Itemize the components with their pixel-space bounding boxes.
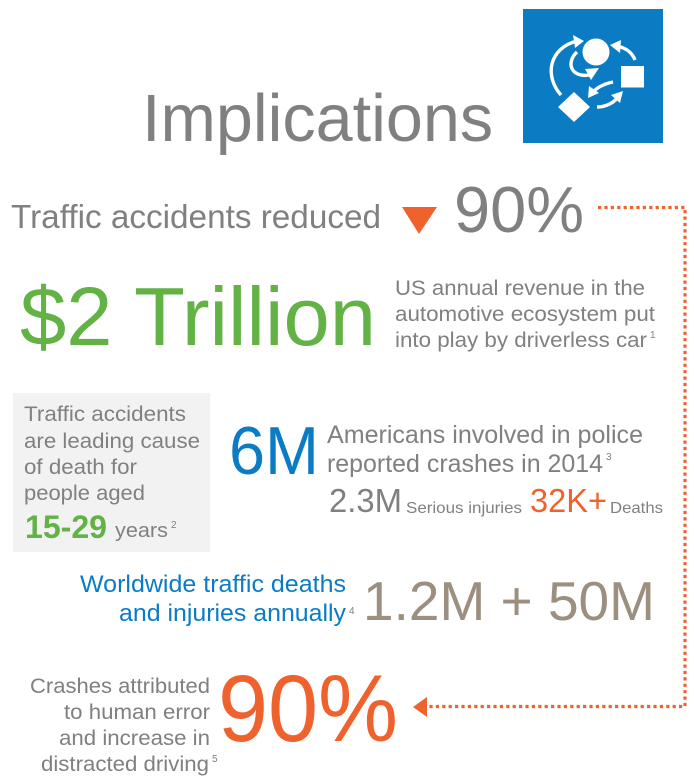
stat: deaths: 32K+ [530,482,607,519]
icon: down triangle [402,207,437,234]
panel: leading cause of death: are leading cause [24,430,200,453]
stat: serious injuries: 2.3M [329,482,402,519]
text: americans in crashes: reported crashes in 2014 [327,450,603,478]
stat: serious injuries: Serious injuries [406,500,522,517]
panel: leading cause of death: 2 [171,520,177,531]
stat: 90% human error: 90% [218,656,398,762]
panel: leading cause of death: of death for [24,456,137,479]
text: revenue description: US annual revenue in the [395,277,645,300]
arrow: dotted connector [413,208,685,717]
text: revenue description: into play by driverless car [395,329,647,352]
text: crashes attributed: to human error [64,700,210,724]
footnote 4: 4 [349,606,355,617]
icon: process cycle [523,9,663,143]
panel: leading cause of death: years [115,519,168,542]
text: revenue description: automotive ecosystem put [395,303,655,326]
text: worldwide traffic deaths: Worldwide traffic deaths [80,571,346,598]
text: americans in crashes [327,421,643,478]
stat: $2 trillion: $2 Trillion [20,270,376,363]
title: Implications [142,82,493,156]
stat: 90% reduction: 90% [454,173,584,246]
text: worldwide traffic deaths: and injuries annually [119,600,347,627]
panel: leading cause of death: 15-29 [25,509,107,545]
footnote 5: 5 [212,754,218,765]
text: crashes attributed: and increase in [59,726,210,750]
panel: leading cause of death: Traffic accidents [24,403,186,426]
text: crashes attributed: Crashes attributed [30,674,210,698]
stat: deaths: Deaths [610,500,663,517]
stat: 1.2M + 50M: 1.2M + 50M [363,570,655,632]
text: revenue description: 1 [650,330,656,341]
text: americans in crashes: 3 [606,452,612,463]
panel: leading cause of death [13,393,210,552]
text: crashes attributed [30,674,210,776]
stat: 6M: 6M [229,413,319,489]
text: americans in crashes: Americans involved in police [327,421,643,449]
stat: deaths [530,482,663,519]
stat: serious injuries [329,482,522,519]
text: worldwide traffic deaths [80,571,347,627]
panel: leading cause of death: people aged [24,482,145,505]
text: crashes attributed: distracted driving [41,752,209,776]
text: traffic accidents reduced: Traffic accidents reduced [11,198,381,235]
text: revenue description [395,277,656,352]
